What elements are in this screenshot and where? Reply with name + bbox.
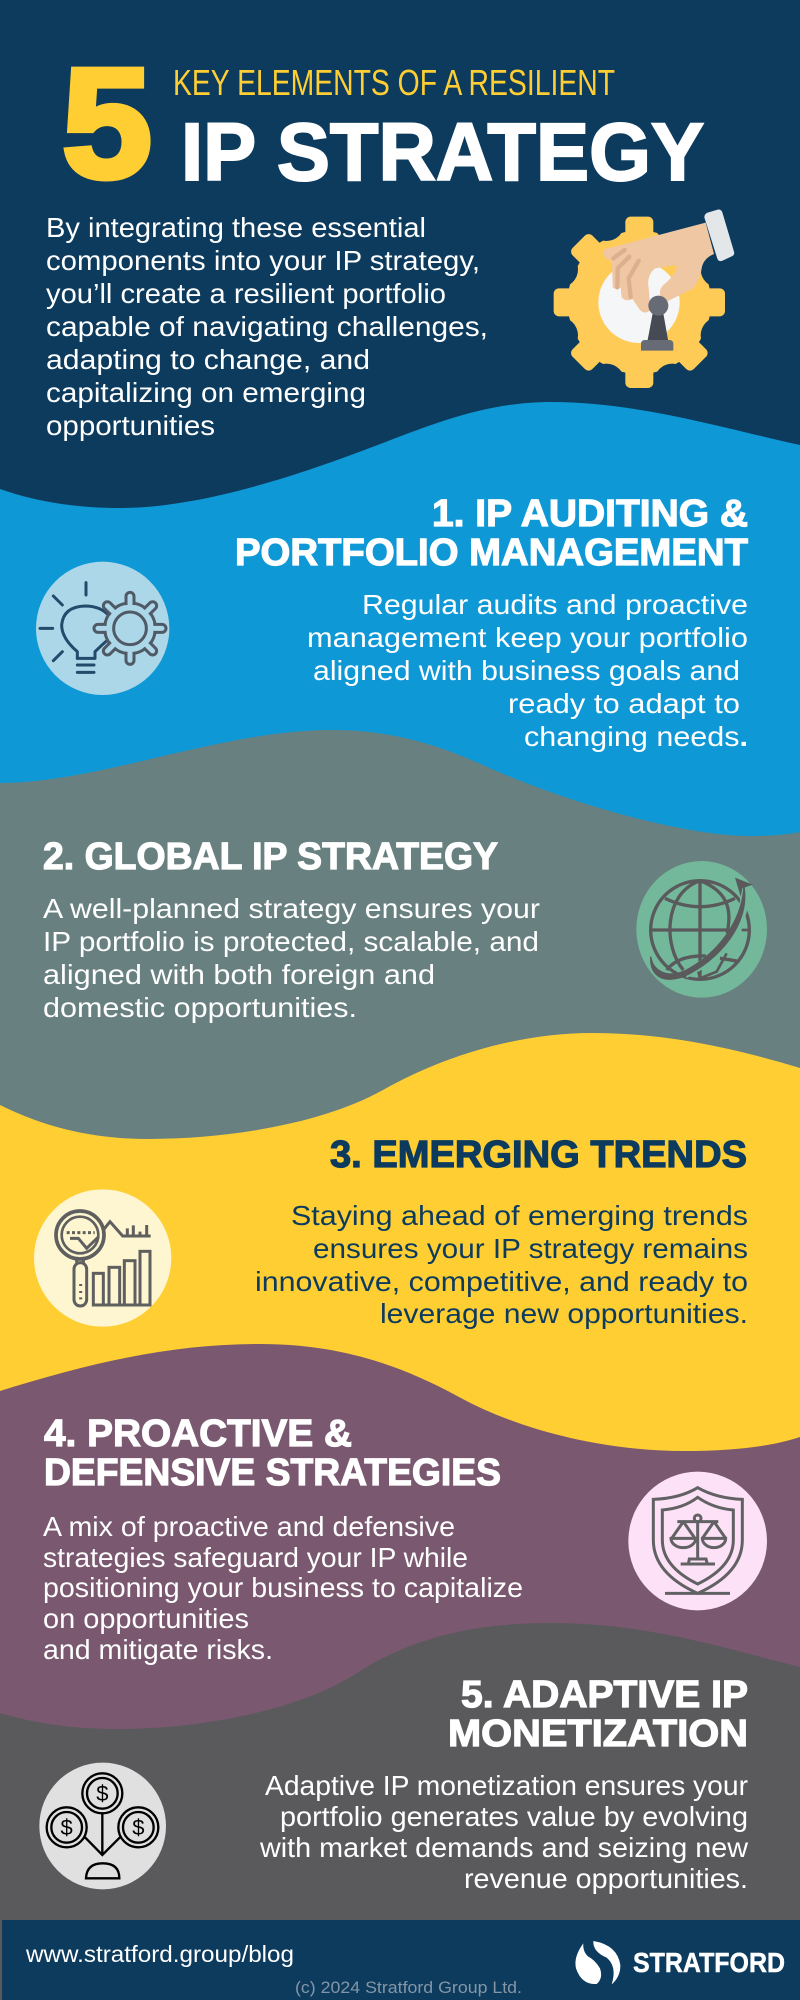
- section 5 heading: [448, 1674, 748, 1755]
- section 3 heading: 3. EMERGING TRENDS: [330, 1134, 747, 1176]
- section 2 text: [43, 893, 540, 1023]
- section 4 text: A mix of proactive and defensive: [43, 1511, 455, 1542]
- intro text: By integrating these essential: [46, 212, 426, 243]
- section 3 text: [255, 1200, 748, 1329]
- section 5 text: Adaptive IP monetization ensures your: [265, 1770, 748, 1801]
- big number 5: 5: [62, 37, 152, 211]
- panel: section 2 wave: [0, 730, 800, 2000]
- title line: key elements: KEY ELEMENTS OF A RESILIENT: [173, 62, 615, 103]
- section 1 text: Regular audits and proactive: [362, 589, 748, 620]
- section 1 heading: 1. IP AUDITING &: [432, 493, 748, 535]
- section 1 text: [307, 589, 748, 752]
- section 1 heading: [235, 493, 748, 574]
- copyright: (c) 2024 Stratford Group Ltd.: [295, 1978, 522, 1997]
- section 3 text: leverage new opportunities.: [380, 1298, 748, 1329]
- title line: IP strategy: IP STRATEGY: [181, 107, 704, 198]
- panel: section 3 wave: [0, 1033, 800, 2000]
- icon: gear with hand moving chess pawn: [541, 204, 737, 400]
- intro text: components into your IP strategy,: [46, 245, 480, 276]
- section 3 text: ensures your IP strategy remains: [313, 1233, 748, 1264]
- intro text: [46, 212, 488, 441]
- intro text: capable of navigating challenges,: [46, 311, 488, 342]
- section 4 text: positioning your business to capitalize: [43, 1572, 523, 1603]
- section 1 text: ready to adapt to: [508, 688, 740, 719]
- section 2 text: aligned with both foreign and: [43, 959, 435, 990]
- footer: [2, 1920, 800, 2000]
- logo: Stratford wordmark: STRATFORD: [633, 1947, 785, 1978]
- intro text: adapting to change, and: [46, 344, 370, 375]
- icon: money tree with dollar coins: $: [96, 1781, 108, 1806]
- title: [62, 37, 704, 211]
- section 4 heading: [44, 1413, 501, 1494]
- intro text: you’ll create a resilient portfolio: [46, 278, 446, 309]
- section 4 heading: DEFENSIVE STRATEGIES: [44, 1452, 501, 1494]
- section 2 text: IP portfolio is protected, scalable, and: [43, 926, 539, 957]
- section 1 text: aligned with business goals and: [313, 655, 740, 686]
- icon: light bulb and gear: [36, 562, 169, 695]
- section 4 text: and mitigate risks.: [43, 1634, 273, 1665]
- logo: Stratford swoosh: [575, 1941, 620, 1984]
- section 3 text: innovative, competitive, and ready to: [255, 1266, 748, 1297]
- icon: magnifier and bar chart: [34, 1189, 171, 1327]
- icon: globe with orbit arrow: [636, 861, 767, 998]
- icon: shield with scales of justice: [628, 1472, 767, 1610]
- footer url: www.stratford.group/blog: [25, 1941, 294, 1967]
- panel: section 5 wave: [0, 1623, 800, 2000]
- panel: section 1 wave: [0, 402, 800, 2000]
- section 1 text: management keep your portfolio: [307, 622, 748, 653]
- section 1 heading: PORTFOLIO MANAGEMENT: [235, 532, 748, 574]
- section 5 text: revenue opportunities.: [464, 1863, 748, 1894]
- section 4 heading: 4. PROACTIVE &: [44, 1413, 352, 1455]
- icon: money tree with dollar coins: $: [61, 1815, 73, 1840]
- intro text: opportunities: [46, 410, 215, 441]
- section 5 text: [259, 1770, 749, 1894]
- section 2 text: domestic opportunities.: [43, 992, 357, 1023]
- section 4 text: strategies safeguard your IP while: [43, 1542, 468, 1573]
- section 1 text: changing needs .: [524, 721, 748, 752]
- intro text: capitalizing on emerging: [46, 377, 366, 408]
- icon: money tree with dollar coins: $: [132, 1815, 144, 1840]
- section 2 heading: 2. GLOBAL IP STRATEGY: [43, 836, 498, 878]
- footer band: [2, 1920, 800, 2000]
- section 2 text: A well-planned strategy ensures your: [43, 893, 540, 924]
- section 3 text: Staying ahead of emerging trends: [291, 1200, 748, 1231]
- section 5 heading: MONETIZATION: [448, 1713, 748, 1755]
- icon: money tree with dollar coins: [39, 1763, 166, 1889]
- section 4 text: [43, 1511, 523, 1665]
- section 5 text: portfolio generates value by evolving: [280, 1801, 748, 1832]
- section 5 heading: 5. ADAPTIVE IP: [461, 1674, 748, 1716]
- panel: section 4 wave: [0, 1344, 800, 2000]
- section 5 text: with market demands and seizing new: [259, 1832, 749, 1863]
- section 4 text: on opportunities: [43, 1603, 249, 1634]
